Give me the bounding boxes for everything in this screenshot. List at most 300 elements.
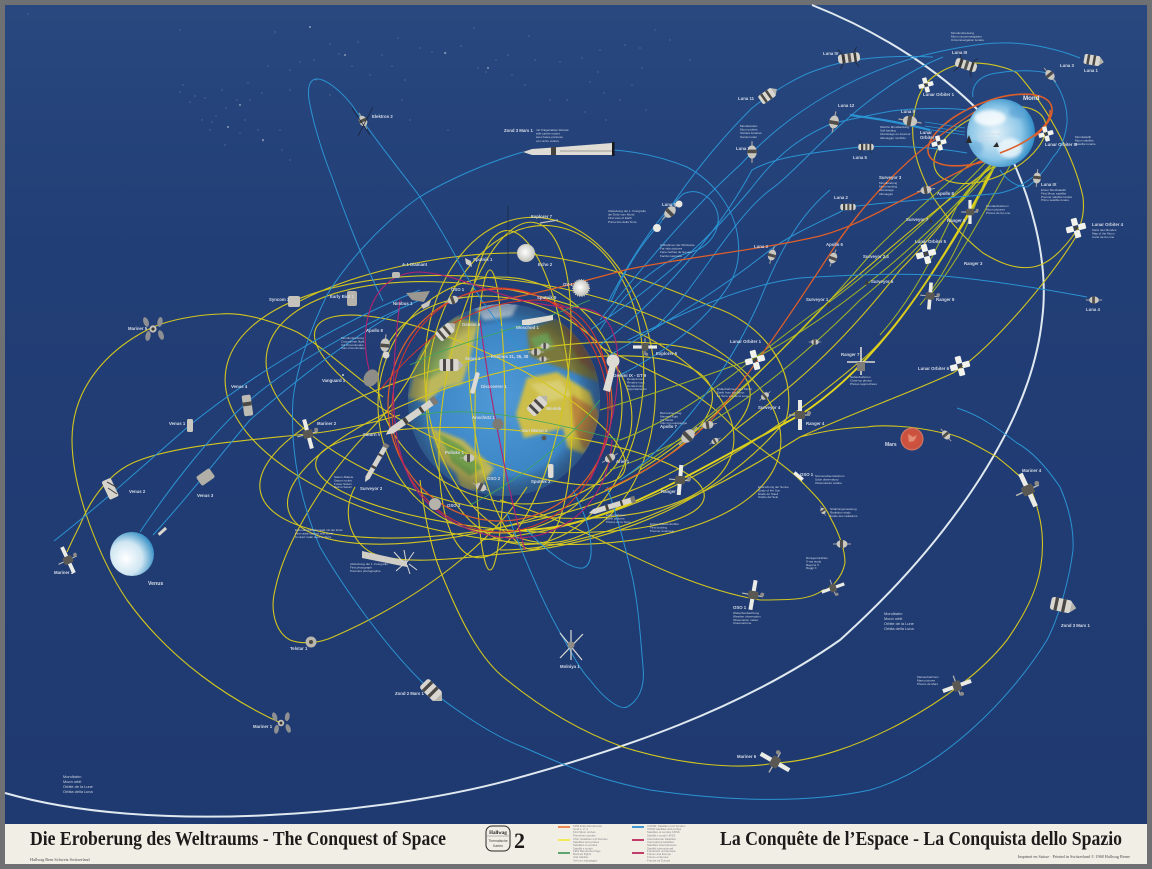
note: lower rocket: First docking <box>650 525 667 529</box>
craft: Luna IV <box>823 47 861 69</box>
note: OSO 1: Solar observatory <box>815 477 839 481</box>
craft: Explorer 7: Explorer 7 <box>531 214 553 219</box>
note: OSO left: Studio del Sole <box>758 495 779 499</box>
note: Mariner 6: Marsaufnahmen <box>917 675 939 679</box>
legend: trajectory colours by year: First Moon probes <box>573 830 596 834</box>
note: Lunar Orbiter 1: Erdaufnahmen vom Mond <box>717 387 752 391</box>
note: Luna 8: First view of Earth <box>608 216 632 220</box>
note: Gemini IX: Rendezvous <box>627 384 644 388</box>
legend: trajectory colours by year: International satellites <box>647 840 675 844</box>
craft: Lunar Orbiter 2 <box>920 130 948 152</box>
craft: Surveyor 1: Surveyor 1 <box>806 297 829 302</box>
note: OSO lower: Weather observation <box>733 614 761 618</box>
craft: Luna IX: Luna IX <box>1041 182 1057 187</box>
note: OSO mid: X-ray study <box>806 559 822 563</box>
note: Zond 3: with carrier rocket <box>536 132 560 136</box>
note: OSO small: Strahlungsmessung <box>830 507 857 511</box>
craft: Lunar Orbiter 3 <box>1037 125 1077 147</box>
craft: Mariner 5: Mariner 5 <box>128 326 148 331</box>
craft: Zond 2 Mars 1 <box>395 678 447 706</box>
craft: Lunar Orbiter 3: Lunar Orbiter III <box>1045 142 1077 147</box>
note: top orbits: Mondumkreisung <box>951 31 974 35</box>
craft: Luna 1 <box>1083 54 1105 73</box>
craft: Zond 3 Mars 1 right <box>1049 596 1091 628</box>
note: Zond 3: avec fusée porteuse <box>536 135 563 139</box>
craft: Ranger 8: Ranger 8 <box>936 297 955 302</box>
craft: Venus 4: Venus 4 <box>231 384 248 389</box>
craft: Apollo 11: Kosmos 31, 36, 38 <box>491 354 529 359</box>
craft: Apollo 8 lunar: Apollo 8 <box>937 191 955 196</box>
note: Luna 8: Prima foto della Terra <box>608 220 637 224</box>
note: Apollo 7: Manned flight <box>660 414 678 418</box>
note: Luna 3: Faccia nascosta <box>660 254 682 258</box>
craft: Ranger 7 <box>841 347 875 375</box>
craft: Ranger 4 <box>789 400 825 430</box>
note: Surveyor 3: Allunaggio <box>879 192 893 196</box>
legend: trajectory colours by year: Frankreich und Europa <box>647 849 676 853</box>
craft: Mariner 2 <box>293 417 337 451</box>
craft: Wostok: Wostok <box>546 406 562 411</box>
craft: Sputnik 3: Sputnik 3 <box>531 479 551 484</box>
craft: Telstar 1 <box>290 636 316 651</box>
note: Apollo 8 left: Vol circumlunaire <box>341 343 364 347</box>
note: Luna IX: Erster Mondsatellit <box>1041 188 1066 192</box>
note: Lunar Orbiter 4: Karte des Mondes <box>1092 228 1117 232</box>
craft: Nimbus 1 <box>393 291 431 309</box>
note: moon orbit lower left: Orbite de la Lune <box>63 784 93 789</box>
craft: Sputnik 1: Sputnik 1 <box>473 257 493 262</box>
craft: Surveyor 5: Surveyor 5 <box>871 279 894 284</box>
craft: Explorer 7 <box>531 214 558 223</box>
moon: Mond <box>966 95 1050 167</box>
craft: Luna 2 <box>834 195 856 214</box>
legend: trajectory colours by year: Vols habités <box>573 855 589 859</box>
craft: Surveyor 7: Surveyor 7 <box>906 217 929 222</box>
note: Lunar Orbiter 4: Carte de la Lune <box>1092 235 1115 239</box>
legend: trajectory colours by year: Satellites internationaux <box>647 843 677 847</box>
craft: Telstar 1: Telstar 1 <box>290 646 308 651</box>
orange and red trajectories <box>380 105 1000 532</box>
craft: Mariner 4 bottom <box>737 743 795 781</box>
craft: Ranger 3: Ranger 3 <box>964 261 983 266</box>
craft: Luna 5 <box>853 140 874 160</box>
note: Zond lower left: Erstmals Radarkontakt mit der Erde <box>295 528 343 532</box>
craft: Ranger 8 <box>919 282 955 310</box>
note: Mariner 6: Mars pictures <box>917 678 936 682</box>
craft: Luna IV: Luna IV <box>823 51 839 56</box>
craft: OSO small 2 <box>818 505 828 517</box>
craft: Lunar Orbiter 6 <box>918 354 972 378</box>
craft: Saturn I <box>439 356 481 371</box>
craft: Apollo 8: Apollo 8 <box>366 328 384 333</box>
craft: Woshod 1: Woschod 1 <box>516 325 539 330</box>
note: moon orbit lower left: Orbita della Luna <box>63 789 93 794</box>
note: Apollo 7: Volo con equipaggio <box>660 421 687 425</box>
craft: Luna 7 <box>736 141 757 163</box>
craft: OSO 4 <box>819 576 847 600</box>
craft: Mariner 3 <box>938 426 954 444</box>
craft: Zond 3 rocket <box>504 128 614 156</box>
note: Luna IX: Primo satellite lunare <box>1041 198 1069 202</box>
note: Ranger 6: Photos de la Lune <box>986 211 1011 215</box>
craft: lower rocket with sun wheel <box>362 550 417 574</box>
craft: Venus 2 <box>101 478 146 500</box>
note: Luna 3: Face cachée de la Lune <box>660 250 692 254</box>
craft: Discoverer 1: Discoverer 1 <box>481 384 507 389</box>
legend: trajectory colours by year: Satelliti e sonde <box>573 846 593 850</box>
craft: Luna 4 <box>1086 296 1102 312</box>
note: Luna 6: Moon probes <box>740 128 758 132</box>
legend: trajectory colours by year: Premières sondes <box>573 833 596 837</box>
craft: Lunar Orbiter 6: Lunar Orbiter 6 <box>918 366 950 371</box>
craft: Surveyor 4: Surveyor 4 <box>758 405 781 410</box>
craft: Ranger 4: Ranger 4 <box>806 421 825 426</box>
craft: Venus 1: Venus 1 <box>169 421 186 426</box>
note: OSO small: Étude des radiations <box>830 513 858 518</box>
craft: Sputnik 1 <box>465 257 493 267</box>
craft: Echo 2: Echo 2 <box>538 262 553 267</box>
craft: Zond 3 rocket: Zond 3 Mars 1 <box>504 128 534 133</box>
moon: Mond: Premières photos <box>978 139 1002 143</box>
craft: Lunar Orbiter 2: Lunar <box>920 130 932 135</box>
note: Gemini IX: Rendezvous <box>627 377 644 381</box>
craft: Lunar Orbiter 4: Lunar Orbiter 4 <box>1092 222 1124 227</box>
note: Luna IX: Premier satellite lunaire <box>1041 195 1073 199</box>
craft: Apollo 6: Apollo 6 <box>826 242 844 247</box>
note: moon orbit right: Mondbahn <box>884 611 902 616</box>
craft: Apollo 8 <box>366 328 391 358</box>
spacecraft: earth orbit satellites <box>253 107 778 734</box>
craft: Apollo 6 <box>826 242 844 268</box>
craft: Pollux 1: Polluks 1 <box>445 450 464 455</box>
craft: Vanguard 1: Vanguard 1 <box>322 378 346 383</box>
note: Apollo 8 left: Mondumkreisung <box>341 336 364 340</box>
craft: Elektron 2: Elektron 2 <box>372 114 393 119</box>
craft: Ariel <box>472 415 504 430</box>
note: Surveyor left: Razzo Saturn <box>334 485 353 489</box>
craft: Venus 1 <box>169 419 193 432</box>
note: Surveyor 3: Moon landing <box>879 185 897 189</box>
craft: Luna 11: Luna 11 <box>738 96 755 101</box>
craft: OSO 1: OSO 1 <box>800 472 814 477</box>
craft: Luna 2 lower: Luna 3 <box>754 244 768 249</box>
craft: Venus 3: Venus 3 <box>197 493 214 498</box>
note: Luna 6: Mondsonden <box>740 124 758 128</box>
legend: trajectory colours by year: Internationale Satelliten <box>647 837 677 841</box>
moon: Mond: First pictures <box>978 135 996 139</box>
legend: trajectory colours by year: USSR satellites and probes <box>647 827 682 831</box>
craft: OSO 1 top: OSO 1 <box>451 287 465 292</box>
craft: San Marco 1 <box>522 428 548 440</box>
legend: trajectory colours by year: USA: Satelliten und Sonden <box>573 837 608 841</box>
craft: Surveyor 2,4: Surveyor 2,4 <box>863 254 889 259</box>
note: Lunar Orbiter 3: Satellite lunaire <box>1075 142 1096 146</box>
craft: Ranger 6 <box>947 200 979 224</box>
craft: Discoverer 1 <box>470 372 507 394</box>
venus planet: Venus <box>148 581 163 587</box>
craft: Lunar Orbiter 5: Lunar Orbiter 5 <box>915 239 947 244</box>
title strip <box>5 824 1147 864</box>
craft: Saturn V: Saturn V <box>363 432 381 437</box>
craft: Ariel: Anschütz 1 <box>472 415 496 420</box>
craft: Luna 12 <box>827 103 855 133</box>
craft: Early Bird 1: Early Bird 1 <box>330 294 354 299</box>
craft: Venus 3 <box>196 468 215 498</box>
note: OSO lower: Observation météo <box>733 618 759 622</box>
legend: trajectory colours by year: Satellites et sondes <box>573 843 598 847</box>
craft: OV-1: OV-1 <box>563 282 573 287</box>
note: Zond lower left: First radar contact with Earth <box>295 531 334 535</box>
craft: Lunar Orbiter 5 <box>914 239 947 266</box>
craft: Mariner 1 <box>253 712 292 734</box>
craft: Luna III <box>952 50 980 78</box>
note: Zond 3: con razzo vettore <box>536 139 559 143</box>
craft: Mariner 4 <box>1008 468 1048 512</box>
note: OSO left: Study of the Sun <box>758 488 781 492</box>
note: Zond lower left: Contact radar avec la Terre <box>295 535 331 539</box>
note: Ranger 7: Close-up photos <box>850 378 872 382</box>
note: Luna 6: Sondes lunaires <box>740 131 762 135</box>
note: Surveyor 3: Alunissage <box>879 188 894 192</box>
logo: Hallwag Thematic Maps: Thematische <box>488 839 508 843</box>
craft: Surveyor rocket <box>360 442 390 491</box>
craft: Mariner 6 right <box>939 671 975 701</box>
spacecraft: lunar probes <box>660 47 1124 781</box>
earth orbits: yellow trajectories <box>67 208 1043 766</box>
note: OSO 1: Observatoire solaire <box>815 481 842 485</box>
print imprint: Imprimé en Suisse · Printed in Switzerland © 1968 Hallwag Berne <box>1018 854 1130 859</box>
note: OSO mid: Raggi X <box>806 566 817 570</box>
craft: Surveyor 3: Surveyor 3 <box>879 175 902 180</box>
note: Lunar Orbiter 1: La Terre vue de la Lune <box>717 394 749 398</box>
craft: Luna IX <box>1032 169 1057 187</box>
craft: Luna 4: Luna 4 <box>1086 307 1100 312</box>
craft: OSO 3 <box>833 540 851 548</box>
legend: trajectory colours by year: Satellites and probes <box>573 840 600 844</box>
craft: Sputnik 3 <box>531 464 554 484</box>
legend: trajectory colours by year: Francia ed Europa <box>647 858 670 862</box>
craft: OSO 3 <box>429 498 461 510</box>
craft: Syncom 3 <box>269 296 300 307</box>
craft: OSO 2 <box>471 476 501 494</box>
map number: 2 <box>514 828 525 853</box>
note: Mariner 6: Photos de Mars <box>917 682 939 686</box>
magenta and green trajectories <box>365 272 620 550</box>
star field <box>28 14 690 160</box>
note: rocket notes: Erdaufnahmen <box>606 513 626 517</box>
globe: Earth with continents <box>404 300 604 496</box>
craft: Apollo 8 lunar <box>916 184 955 196</box>
mars planet <box>885 428 924 450</box>
craft: Venus probe <box>158 527 167 536</box>
legend: trajectory colours by year: UdSSR: Satelliten und Sonden <box>647 824 686 828</box>
craft: OSO 1 lower <box>733 578 766 612</box>
craft: Woshod 1 <box>516 315 553 330</box>
note: Apollo 8 left: Circumlunar flight <box>341 339 365 343</box>
craft: Ranger 6: Ranger 6 <box>947 218 966 223</box>
craft: Molniya 1 <box>560 630 583 669</box>
note: Luna 9: Soft landing <box>880 129 896 133</box>
craft: Ariel 1: Ariel 1 <box>616 459 630 464</box>
craft: Luna 1: Luna 1 <box>1084 68 1098 73</box>
craft: A-1 Diamant <box>392 262 428 278</box>
craft: Luna 8 <box>653 200 682 232</box>
note: Surveyor 3: Mondlandung <box>879 181 898 185</box>
craft: Mariner 2 lower <box>53 543 83 577</box>
note: Gemini IX: Appuntamento <box>627 387 647 391</box>
legend: trajectory colours by year: Voli con equipaggio <box>573 858 598 862</box>
venus planet <box>110 532 163 587</box>
note: Gemini IX: Rendez-vous <box>627 380 645 384</box>
craft: Lunar Orbiter 1: Lunar Orbiter 1 <box>730 339 762 344</box>
craft: Mariner 1: Mariner 1 <box>253 724 273 729</box>
craft: Luna 9 <box>898 109 922 128</box>
note: OSO mid: Röntgenstrahlen <box>806 556 828 560</box>
note: moon orbit right: Moon orbit <box>884 616 903 621</box>
craft: Surveyor 4 <box>757 389 781 410</box>
craft: Luna 3 <box>1041 63 1074 84</box>
note: Lunar Orbiter 3: Mondsatellit <box>1075 135 1091 139</box>
blue trajectories <box>54 43 1087 799</box>
craft: Zond 3 Mars 1 right: Zond 3 Mars 1 <box>1061 623 1091 628</box>
moon: Mond: Erste Aufnahmen <box>978 132 1001 136</box>
logo: Hallwag Thematic Maps <box>486 826 510 851</box>
craft: Early Bird 1 <box>330 291 357 306</box>
mars planet: Mars <box>885 442 897 448</box>
craft: Ariel 1 <box>600 450 630 466</box>
note: Surveyor left: Saturn rocket <box>334 478 352 482</box>
craft: San Marco 1: San Marco 1 <box>522 428 548 433</box>
note: Ranger 6: Moon pictures <box>986 207 1005 211</box>
spacecraft: Venus probes <box>53 316 337 577</box>
note: moon orbit lower left: Moon orbit <box>63 779 82 784</box>
note: Luna 9: Allunaggio morbido <box>880 136 906 140</box>
craft: OV-1 <box>563 280 589 296</box>
craft: Lunar Orbiter 4 <box>1064 216 1124 240</box>
legend: trajectory colours by year: 1961 Bemannte Flüge <box>573 849 601 853</box>
craft: OSO 2: OSO 2 <box>487 476 501 481</box>
note: Ranger 7: Photos rapprochées <box>850 382 877 386</box>
craft: Luna 11 <box>738 85 780 105</box>
legend: trajectory colours by year: Manned flights <box>573 852 592 856</box>
craft: Echo 2 <box>508 206 553 275</box>
note: moon orbit lower left: Mondbahn <box>63 774 81 779</box>
lunar transfer trajectories: yellow bundle <box>480 152 1077 550</box>
note: Luna 9: Alunissage en douceur <box>880 132 911 136</box>
craft: Nimbus 1: Nimbus 1 <box>393 301 413 306</box>
craft: Surveyor small <box>809 339 821 345</box>
note: Luna 6: Sonde lunari <box>740 135 757 139</box>
craft: Luna 12: Luna 12 <box>838 103 855 108</box>
note: moon orbit right: Orbite de la Lune <box>884 621 914 626</box>
craft: Luna 7: Luna 7 <box>736 146 750 151</box>
craft: Wostok <box>526 392 562 417</box>
craft: OSO 1 <box>793 471 814 481</box>
craft: Surveyor 5 <box>865 279 894 285</box>
note: rocket notes: Earth pictures <box>606 516 625 520</box>
craft: Mariner 2 lower: Mariner 2 <box>54 570 74 575</box>
title: German and English: Die Eroberung des Weltraums - The Conquest of Space <box>30 828 446 850</box>
note: Lunar Orbiter 3: Moon satellite <box>1075 138 1094 142</box>
craft: A-1 Diamant: A-1 Diamant <box>402 262 428 267</box>
note: Apollo 7: Vol habité <box>660 418 674 422</box>
craft: Lunar Orbiter 1 top: Lunar Orbiter 1 <box>923 92 955 97</box>
craft: Luna 2: Luna 2 <box>834 195 848 200</box>
legend: trajectory colours by year: 1959 Erste Mondsonde <box>573 824 602 828</box>
craft: Ranger 5 <box>661 464 692 496</box>
note: top orbits: Moon circumnavigation <box>951 34 982 38</box>
note: Apollo 7: Bemannter Flug <box>660 411 682 415</box>
note: OSO small: Radiation study <box>830 510 851 514</box>
craft: OSO 1 top <box>443 287 465 307</box>
craft: Apollo 7 <box>660 419 718 449</box>
publisher imprint: Hallwag Bern Schweiz Switzerland <box>30 857 91 862</box>
craft: Mariner 2: Mariner 2 <box>317 421 337 426</box>
craft: Mariner 4 bottom: Mariner 6 <box>737 754 757 759</box>
craft: OSO 1 lower: OSO 1 <box>733 605 747 610</box>
note: Ranger 7: Nahaufnahmen <box>850 375 871 379</box>
legend: trajectory colours by year: Satelliti internazionali <box>647 846 674 850</box>
craft: Lunar Orbiter 1 <box>730 339 767 372</box>
logo: Hallwag Thematic Maps: Karten <box>493 844 503 848</box>
note: OSO lower: Wetterbeobachtung <box>733 611 759 615</box>
craft: Vanguard 1 <box>322 367 382 389</box>
craft: Sputnik 5: Sputnik 5 <box>537 295 557 300</box>
craft: Apollo 11 <box>491 343 552 362</box>
craft: Gemini: Gemini 5 <box>462 322 481 327</box>
note: lower rocket: Premier amarrage <box>650 529 675 533</box>
craft: Molniya 1: Molniya 1 <box>560 664 580 669</box>
craft: OSO 3: OSO 3 <box>447 503 461 508</box>
note: rocket notes: Photos de la Terre <box>606 520 631 524</box>
note: lower rocket: Erstes Raketentreffen <box>650 522 679 526</box>
craft: Surveyor 7 <box>906 217 933 223</box>
craft: Luna III: Luna III <box>952 50 967 55</box>
craft: Venus 4 <box>231 384 253 416</box>
craft: Lunar Orbiter 2: Orbiter <box>920 135 935 140</box>
craft: Luna 9: Luna 9 <box>901 109 915 114</box>
note: OSO lower: Osservazione <box>733 621 752 625</box>
craft: Zond 2 Mars 1: Zond 2 Mars 1 <box>395 691 425 696</box>
note: lower rocket left: Abdeckung der 1. Fotografie <box>350 562 388 566</box>
craft: Surveyor rocket: Surveyor 2 <box>360 486 383 491</box>
craft: rocket lower right <box>588 496 636 516</box>
craft: Syncom 3: Syncom 3 <box>269 297 290 302</box>
craft: Ranger 7: Ranger 7 <box>841 352 860 357</box>
note: OSO left: Étude du Soleil <box>758 491 779 496</box>
note: Zond 3: mit Trägerrakete Wostok <box>536 128 569 132</box>
craft: Luna 3: Luna 3 <box>1060 63 1074 68</box>
craft: Gemini IX: Gemini IX - GT 9 <box>613 373 647 378</box>
legend: trajectory colours by year <box>558 824 686 862</box>
note: Luna 3: Aufnahmen der Rückseite <box>660 243 695 247</box>
legend: trajectory colours by year: France et Europe <box>647 855 669 859</box>
craft: Saturn V <box>363 396 439 438</box>
craft: Lunar Orbiter 1 top <box>917 76 955 97</box>
craft: Surveyor probe <box>708 435 722 447</box>
note: OSO left: Erforschung der Sonne <box>758 485 789 489</box>
note: Surveyor left: Fusée Saturn <box>334 482 352 486</box>
logo: Hallwag Thematic Maps: Hallwag <box>489 831 507 836</box>
craft: Surveyor 1 <box>806 297 831 307</box>
note: Surveyor left: Saturn-Rakete <box>334 475 354 479</box>
note: Lunar Orbiter 4: Map of the Moon <box>1092 231 1115 235</box>
craft: Mariner 5 <box>128 316 165 341</box>
note: Luna 3: Far side pictures <box>660 247 683 251</box>
note: moon orbit right: Orbita della Luna <box>884 626 914 631</box>
legend: trajectory colours by year: Satelliti e sonde URSS <box>647 833 675 837</box>
craft: Mariner 4: Mariner 4 <box>1022 468 1042 473</box>
